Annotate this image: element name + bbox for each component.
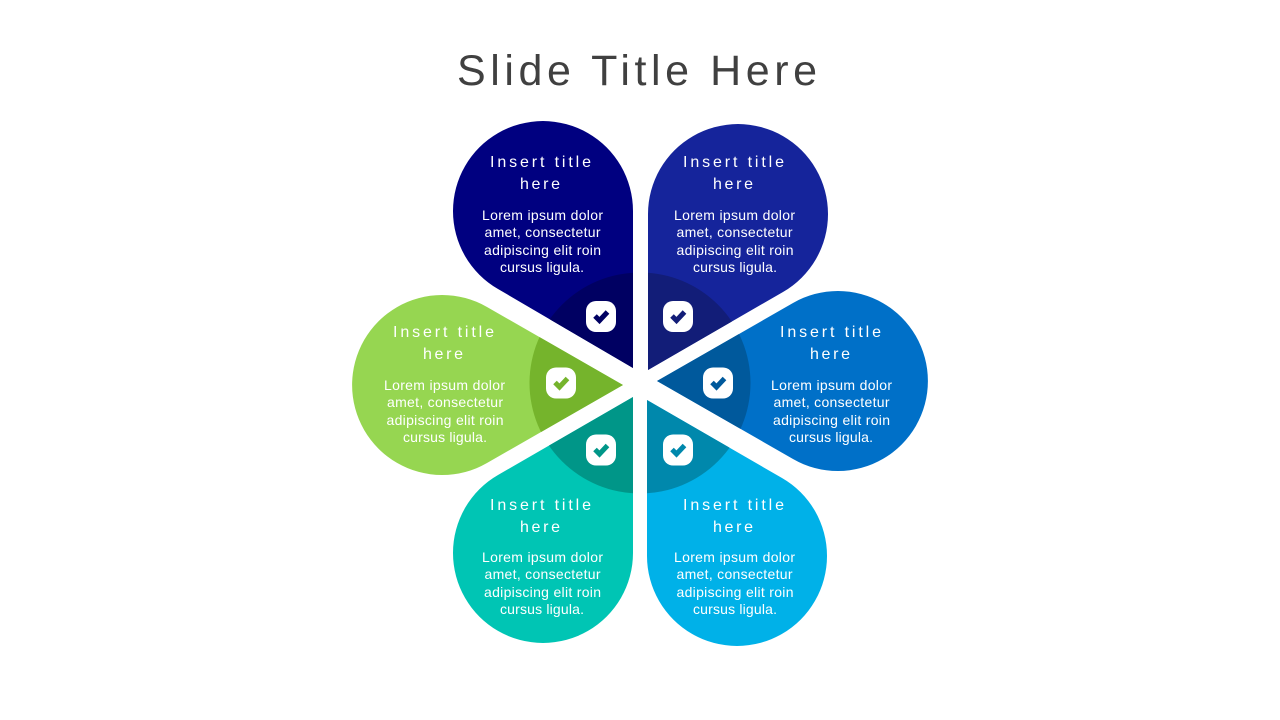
- petal heading: [683, 497, 784, 536]
- petal shape: [647, 400, 827, 646]
- petal body text: Lorem ipsum dolor: [771, 377, 892, 393]
- petal body text: cursus ligula.: [693, 259, 777, 275]
- panel: bottom-left petal: [453, 397, 633, 643]
- icon: check badge: [703, 368, 733, 398]
- petal body text: adipiscing elit roin: [484, 584, 601, 600]
- icon: check badge: [663, 434, 693, 466]
- petal heading: [490, 154, 591, 193]
- petal body text: cursus ligula.: [693, 601, 777, 617]
- petal body text: amet, consectetur: [484, 224, 601, 240]
- petal body text: adipiscing elit roin: [386, 412, 504, 428]
- panel: right petal: [657, 291, 928, 471]
- petal body text: adipiscing elit roin: [676, 584, 794, 600]
- petal heading: [683, 154, 784, 193]
- petal body text: Lorem ipsum dolor: [384, 377, 505, 393]
- petal heading: here: [520, 519, 560, 536]
- petal body text: Lorem ipsum dolor: [482, 207, 603, 223]
- inner dark segment: [550, 272, 633, 368]
- petal body text: adipiscing elit roin: [484, 242, 601, 258]
- petal heading: [393, 324, 494, 363]
- petal heading: here: [713, 519, 753, 536]
- petal body text: [482, 549, 603, 617]
- petal body text: adipiscing elit roin: [773, 412, 890, 428]
- petal body text: amet, consectetur: [676, 566, 793, 582]
- petal shape: [648, 124, 828, 370]
- petal heading: [490, 497, 591, 536]
- petal body text: amet, consectetur: [484, 566, 601, 582]
- petal shape: [352, 295, 623, 475]
- petal body text: cursus ligula.: [500, 601, 584, 617]
- petal heading: Insert title: [683, 497, 784, 514]
- petal heading: [780, 324, 881, 363]
- panel: left petal: [352, 295, 623, 475]
- petal body text: [482, 207, 603, 275]
- petal heading: Insert title: [490, 154, 591, 171]
- petal body text: [674, 207, 795, 275]
- petal body text: amet, consectetur: [387, 394, 503, 410]
- petal heading: here: [810, 346, 850, 363]
- petal body text: [674, 549, 795, 617]
- inner dark segment: [530, 337, 623, 432]
- petal heading: here: [423, 346, 463, 363]
- petal body text: Lorem ipsum dolor: [674, 207, 795, 223]
- icon: check badge: [546, 368, 576, 398]
- petal shape: [657, 291, 928, 471]
- petal body text: adipiscing elit roin: [676, 242, 794, 258]
- panel: top-left petal: [453, 121, 633, 368]
- petal heading: Insert title: [683, 154, 784, 171]
- petal body text: cursus ligula.: [789, 429, 873, 445]
- petal heading: Insert title: [393, 324, 494, 341]
- petal body text: amet, consectetur: [676, 224, 793, 240]
- petal body text: [771, 377, 892, 445]
- panel: bottom-right petal: [647, 400, 827, 646]
- inner dark segment: [647, 400, 730, 494]
- inner dark segment: [657, 334, 750, 429]
- inner dark segment: [549, 397, 633, 494]
- icon: check badge: [586, 434, 616, 466]
- petal body text: Lorem ipsum dolor: [482, 549, 603, 565]
- petal heading: here: [520, 176, 560, 193]
- petal body text: cursus ligula.: [500, 259, 584, 275]
- petal body text: [384, 377, 505, 445]
- icon: check badge: [663, 301, 693, 332]
- title: Slide Title Here: [457, 47, 817, 95]
- petal shape: [453, 397, 633, 643]
- petal body text: cursus ligula.: [403, 429, 487, 445]
- petal body text: amet, consectetur: [774, 394, 890, 410]
- petal body text: Lorem ipsum dolor: [674, 549, 795, 565]
- petal heading: Insert title: [780, 324, 881, 341]
- petal heading: Insert title: [490, 497, 591, 514]
- inner dark segment: [648, 272, 732, 370]
- panel: top-right petal: [648, 124, 828, 370]
- petal heading: here: [713, 176, 753, 193]
- petal shape: [453, 121, 633, 368]
- icon: check badge: [586, 301, 616, 332]
